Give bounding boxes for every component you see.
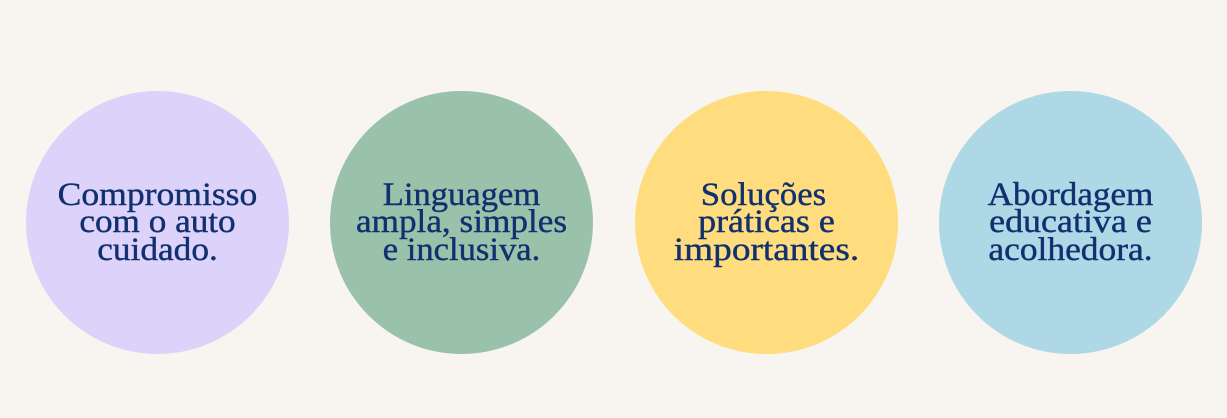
- text: soluções: importantes.: [674, 232, 859, 268]
- panel: compromisso circle: [26, 91, 289, 354]
- text: compromisso: [58, 176, 257, 268]
- text: abordagem: [988, 176, 1153, 268]
- text: abordagem: Abordagem: [988, 176, 1153, 212]
- text: linguagem: Linguagem: [383, 176, 540, 212]
- text: compromisso: cuidado.: [97, 232, 218, 268]
- text: soluções: Soluções: [701, 176, 826, 212]
- text: compromisso: com o auto: [79, 204, 236, 240]
- text: linguagem: [356, 176, 567, 268]
- panel: soluções circle: [635, 91, 898, 354]
- panel: linguagem circle: [330, 91, 593, 354]
- text: abordagem: acolhedora.: [988, 232, 1153, 268]
- text: linguagem: e inclusiva.: [383, 232, 540, 268]
- text: soluções: práticas e: [698, 204, 835, 240]
- text: linguagem: ampla, simples: [356, 204, 567, 240]
- text: abordagem: educativa e: [989, 204, 1152, 240]
- text: compromisso: Compromisso: [58, 176, 257, 212]
- text: soluções: [674, 176, 859, 268]
- panel: abordagem circle: [939, 91, 1202, 354]
